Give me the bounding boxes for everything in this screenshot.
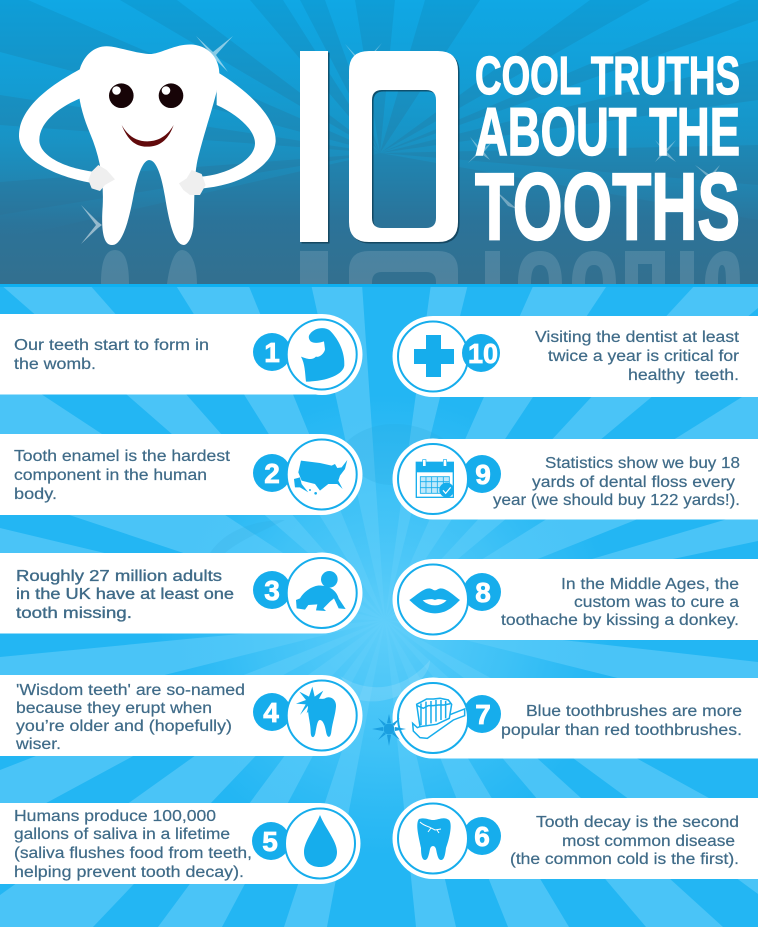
fact 4 text [15, 682, 245, 753]
tooth reflection [101, 250, 197, 284]
fact 6 row [392, 798, 758, 879]
tooth hands [88, 165, 206, 195]
big number 10 [300, 51, 460, 244]
tooth arms and body [19, 45, 276, 245]
number badge 1 [253, 333, 291, 371]
fact 2 text: body. [14, 486, 57, 503]
fact 2 text: component in the human [14, 467, 207, 484]
number badge 6 [463, 817, 501, 855]
fact 2 row [0, 434, 362, 515]
tooth eyes [109, 83, 183, 108]
fact 2 text [14, 448, 231, 503]
number badge 7: 7 [475, 699, 491, 730]
fact 10 text: healthy teeth. [628, 367, 739, 384]
fact 7 text [501, 703, 742, 739]
fact 5 text: (saliva flushes food from teeth, [14, 845, 252, 862]
fact 7 text: Blue toothbrushes are more [526, 703, 742, 720]
fact 9 text: year (we should buy 122 yards!). [493, 492, 740, 509]
number badge 8: 8 [475, 577, 491, 608]
number badge 7 [463, 695, 501, 733]
fact 3 row [0, 552, 362, 634]
fact 3 text: Roughly 27 million adults [16, 568, 222, 585]
fact 9 text: Statistics show we buy 18 [545, 455, 740, 472]
icon: medical cross [398, 322, 468, 392]
number badge 5: 5 [262, 826, 278, 857]
fact 2 text: Tooth enamel is the hardest [14, 448, 231, 465]
fact 1 text [14, 337, 209, 373]
fact 5 text: gallons of saliva in a lifetime [14, 826, 230, 843]
icon: tooth with pain burst [287, 680, 357, 750]
fact 9 text [493, 455, 740, 509]
fact 7 text: popular than red toothbrushes. [501, 722, 742, 739]
fact 6 text [510, 814, 739, 868]
fact 5 text [14, 808, 252, 881]
sparkles [81, 36, 233, 244]
icon: calendar [398, 444, 468, 514]
fact 8 text: toothache by kissing a donkey. [501, 612, 739, 629]
number badge 2: 2 [264, 458, 280, 489]
icon: flexed arm [287, 320, 357, 390]
number badge 3 [253, 571, 291, 609]
number badge 3: 3 [264, 575, 280, 606]
icon: water drop [285, 808, 355, 878]
fact 5 text: Humans produce 100,000 [14, 808, 216, 825]
fact 10 text [535, 329, 740, 384]
number badge 2 [253, 454, 291, 492]
fact 4 row [0, 675, 362, 756]
fact 3 text: in the UK have at least one [16, 586, 234, 603]
title sparkles [345, 43, 720, 209]
number badge 5 [252, 822, 290, 860]
fact 1 text: the womb. [14, 356, 96, 373]
fact 1 text: Our teeth start to form in [14, 337, 209, 354]
fact 4 text: because they erupt when [16, 700, 212, 717]
fact 8 row [392, 559, 758, 640]
header banner background [0, 0, 758, 284]
number badge 6: 6 [474, 821, 490, 852]
fact 6 text: most common disease [562, 833, 735, 850]
icon: crawling baby [287, 558, 357, 628]
fact 7 row [372, 678, 758, 758]
fact 5 text: helping prevent tooth decay). [14, 864, 244, 881]
number badge 10: 10 [468, 338, 498, 369]
tooth mascot [19, 36, 276, 284]
number badge 10 [462, 334, 500, 372]
fact 8 text: custom was to cure a [574, 594, 739, 611]
icon: lips [398, 564, 468, 634]
title [300, 43, 740, 284]
icon: cracked tooth [398, 804, 468, 874]
fact 6 text: Tooth decay is the second [536, 814, 739, 831]
number badge 9 [463, 455, 501, 493]
tooth smile [122, 125, 174, 147]
fact 10 text: Visiting the dentist at least [535, 329, 740, 346]
fact 3 text [16, 568, 234, 622]
icon: blue starburst [372, 714, 406, 746]
number badge 9: 9 [475, 459, 491, 490]
fact 6 text: (the common cold is the first). [510, 851, 739, 868]
fact 9 text: yards of dental floss every [532, 474, 735, 491]
icon: USA map [287, 440, 357, 510]
faint eye and smile watermark [210, 424, 445, 701]
fact 4 text: 'Wisdom teeth' are so-named [16, 682, 245, 699]
fact 3 text: tooth missing. [16, 605, 132, 622]
panel background with sunburst rays [0, 284, 758, 927]
number badge 4: 4 [263, 697, 279, 728]
title reflection [300, 251, 740, 284]
icon: toothbrush [398, 683, 468, 753]
number badge 8 [463, 573, 501, 611]
fact 5 row [0, 803, 360, 884]
fact 8 text [501, 576, 739, 629]
fact 4 text: you’re older and (hopefully) [16, 718, 232, 735]
fact 4 text: wiser. [15, 736, 61, 753]
fact 9 row [392, 438, 758, 520]
fact 10 row [392, 316, 758, 397]
number badge 1: 1 [264, 337, 280, 368]
number badge 4 [253, 693, 291, 731]
fact 1 row [0, 314, 362, 395]
fact 8 text: In the Middle Ages, the [561, 576, 739, 593]
fact 10 text: twice a year is critical for [548, 348, 739, 365]
